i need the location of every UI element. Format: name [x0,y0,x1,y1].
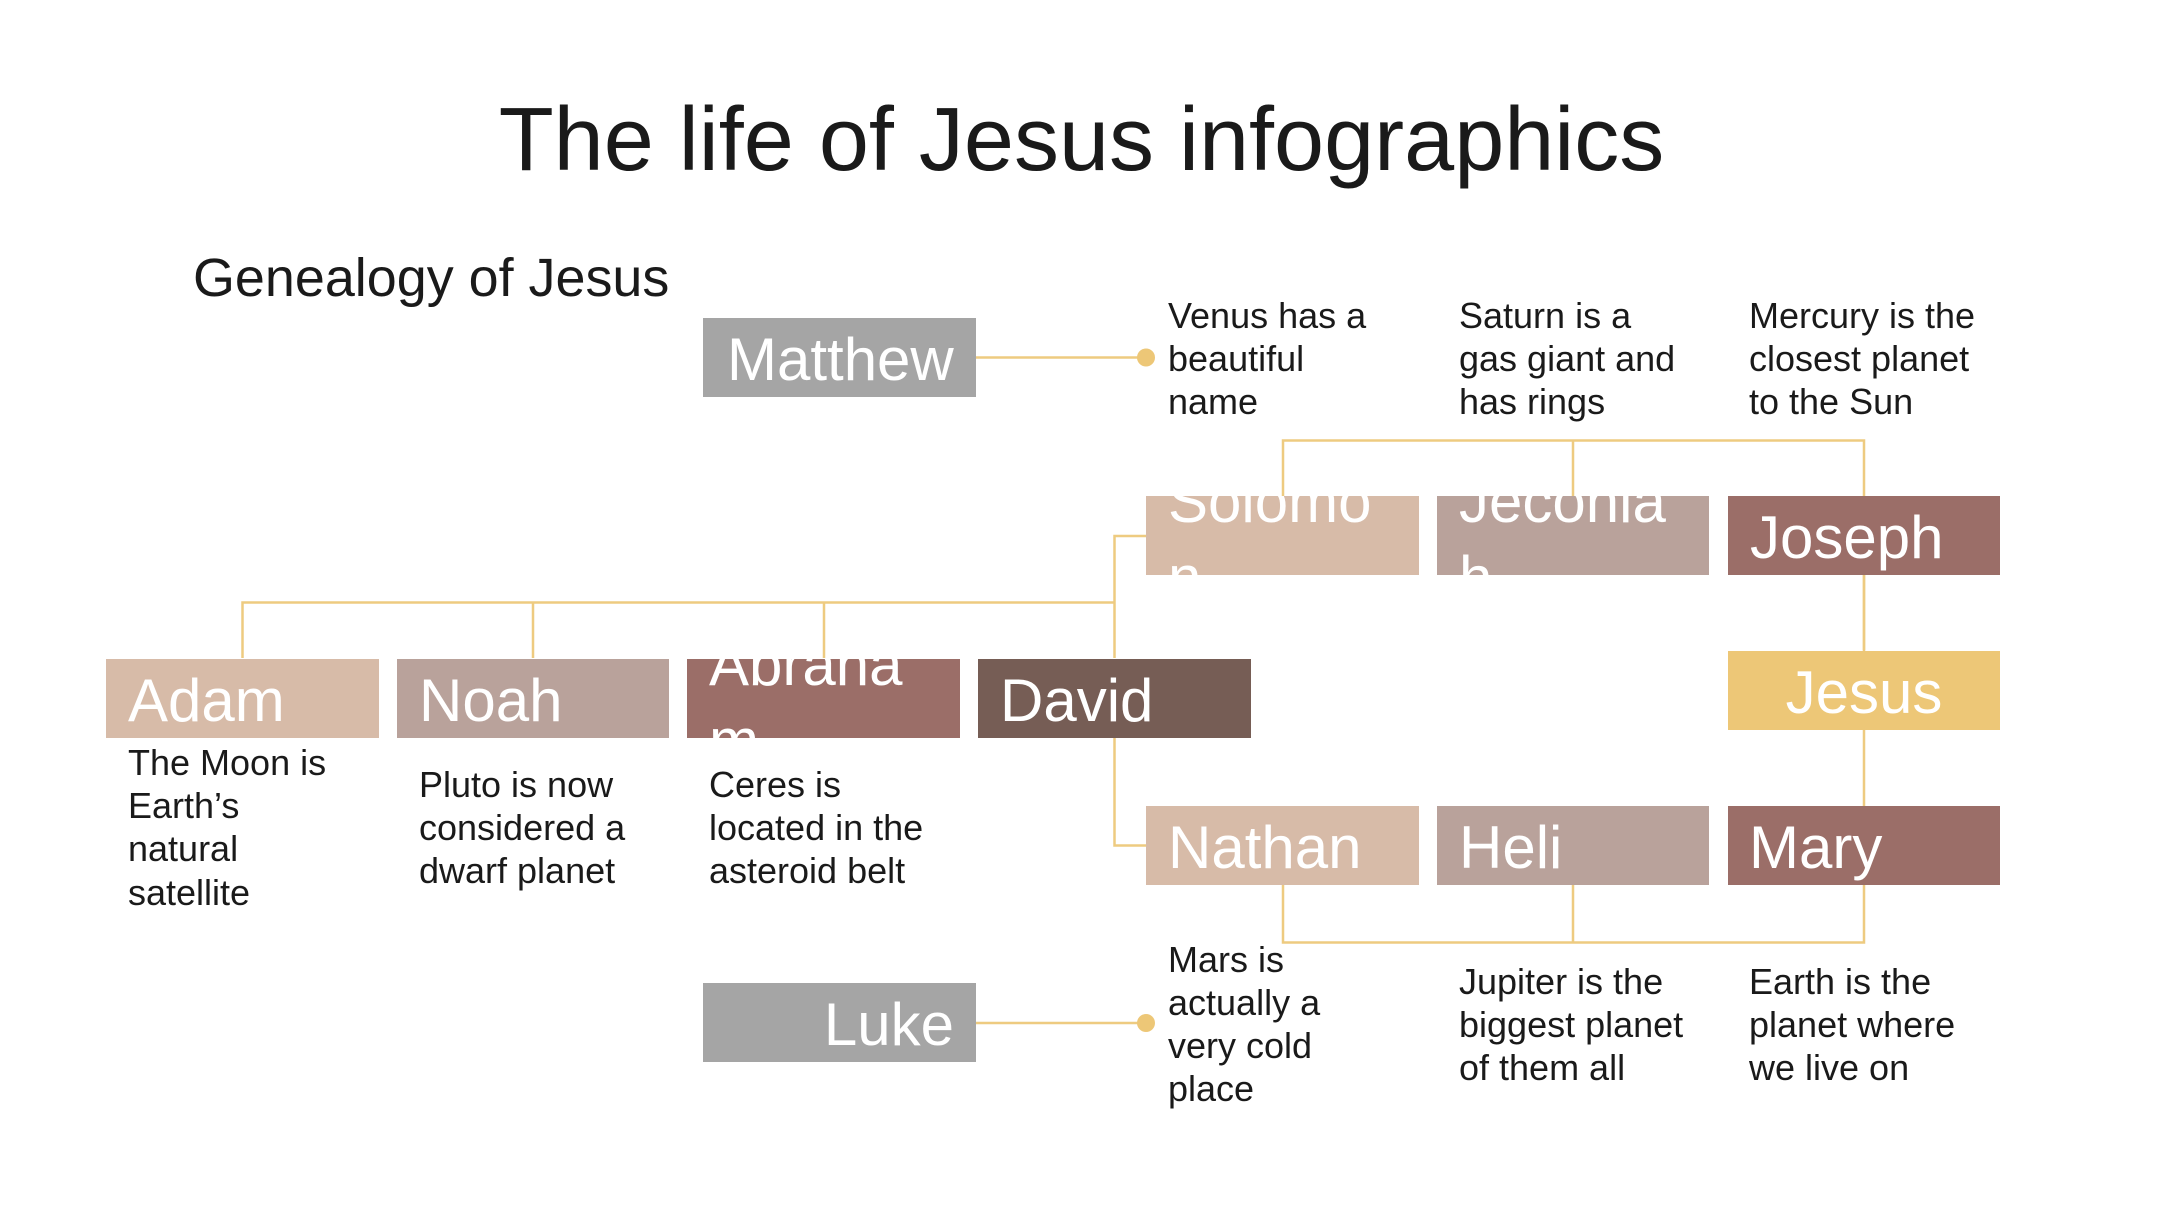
box: Joseph [1728,496,2000,575]
connector: Luke to dot [976,1014,1155,1032]
box: Noah: Noah [419,667,562,734]
text: Mercury: closest planet [1749,338,1969,379]
text: Venus: beautiful [1168,338,1304,379]
box: Heli [1437,806,1709,885]
box: David: David [1000,667,1153,734]
text: Venus: name [1168,381,1258,422]
text: Moon: satellite [128,872,250,913]
box: Luke [703,983,976,1062]
text: Jupiter: biggest planet [1459,1004,1683,1045]
box: Heli: Heli [1459,814,1562,881]
text: Mars: actually a [1168,982,1320,1023]
text: Mars: place [1168,1068,1254,1109]
connector: Matthew to dot [976,348,1155,366]
text: Mercury: to the Sun [1749,381,1913,422]
text: Pluto [419,764,626,891]
title: The life of Jesus infographics [499,90,1664,190]
text: Earth: we live on [1749,1047,1909,1088]
box: Jesus [1728,651,2000,730]
box: Luke: Luke [824,991,954,1058]
box: Mary: Mary [1749,814,1882,881]
connector: David to Solomon and Nathan [1114,536,1146,846]
text: Ceres [709,764,923,891]
text: Saturn: gas giant and [1459,338,1675,379]
text: Earth: planet where [1749,1004,1955,1045]
box: Jeconiah [1437,496,1709,575]
text: Ceres: Ceres is [709,764,841,805]
box: Nathan: Nathan [1168,814,1361,881]
text: Ceres: located in the [709,807,923,848]
text: Ceres: asteroid belt [709,850,905,891]
text: Pluto: considered a [419,807,625,848]
text: Saturn: has rings [1459,381,1605,422]
box: Matthew: Matthew [727,326,954,393]
subtitle: Genealogy of Jesus [193,248,669,308]
box: David [978,659,1251,738]
box: Joseph: Joseph [1750,504,1943,571]
box: Noah [397,659,669,738]
box: Mary [1728,806,2000,885]
text: Mercury [1749,295,1975,422]
text: Jupiter: Jupiter is the [1459,961,1663,1002]
text: Moon: Earth’s [128,785,239,826]
box: Jesus: Jesus [1786,659,1942,726]
connector: Adam, Noah, Abraham, David bracket [242,602,1114,658]
text: Pluto: dwarf planet [419,850,615,891]
text: Pluto: Pluto is now [419,764,613,805]
box: Adam: Adam [128,667,285,734]
connector: Nathan, Heli, Mary bracket [1283,885,1864,942]
text: Mars: Mars is [1168,939,1284,980]
box: Abraham [687,659,960,738]
box: Nathan [1146,806,1419,885]
connector: Joseph, Jesus, Mary [1863,575,1865,806]
box: Adam [106,659,379,738]
connector: Solomon, Jeconiah, Joseph bracket [1283,440,1864,650]
text: Moon [128,742,326,913]
text: Moon: natural [128,828,238,869]
text: Mars [1168,939,1320,1109]
text: Jupiter: of them all [1459,1047,1625,1088]
text: Saturn [1459,295,1675,422]
text: Mercury: Mercury is the [1749,295,1975,336]
text: Saturn: Saturn is a [1459,295,1631,336]
text: Earth: Earth is the [1749,961,1931,1002]
text: Jupiter [1459,961,1683,1088]
text: Earth [1749,961,1955,1088]
text: Venus: Venus has a [1168,295,1366,336]
box: Solomon [1146,496,1419,575]
text: Mars: very cold [1168,1025,1312,1066]
text: Venus [1168,295,1366,422]
text: Moon: The Moon is [128,742,326,783]
